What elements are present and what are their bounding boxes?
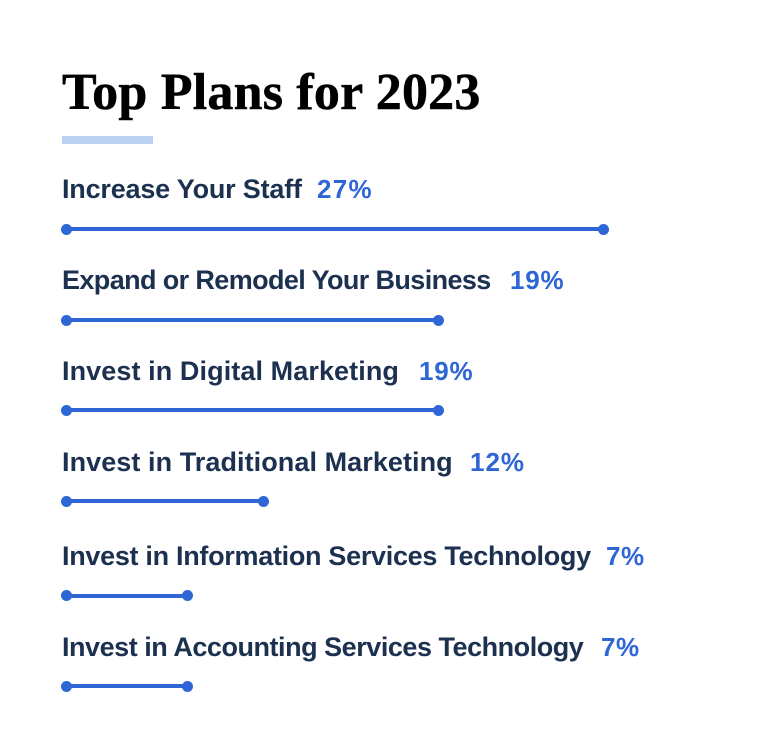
text: 7% <box>601 632 640 662</box>
row: Expand or Remodel <box>61 265 564 326</box>
text: Invest in Traditional Marketing <box>62 447 453 477</box>
row: Information Services <box>61 541 645 601</box>
text: 27% <box>317 174 373 204</box>
text: Invest in Information Services Technology <box>62 541 591 571</box>
text: 7% <box>606 541 645 571</box>
row: Increase Your Staff <box>61 174 609 235</box>
text: 19% <box>510 265 564 295</box>
title underline <box>62 136 153 144</box>
text: Increase Your Staff <box>62 174 302 204</box>
text: Invest in Digital Marketing <box>62 356 399 386</box>
row: Accounting Services <box>61 632 640 692</box>
text: 19% <box>419 356 473 386</box>
title: Top Plans for 2023 <box>62 64 481 121</box>
text: 12% <box>470 447 525 477</box>
text: Invest in Accounting Services Technology <box>62 632 583 662</box>
row: Traditional Marketing <box>61 447 525 507</box>
row: Digital Marketing <box>61 356 473 416</box>
text: Expand or Remodel Your Business <box>62 265 491 295</box>
